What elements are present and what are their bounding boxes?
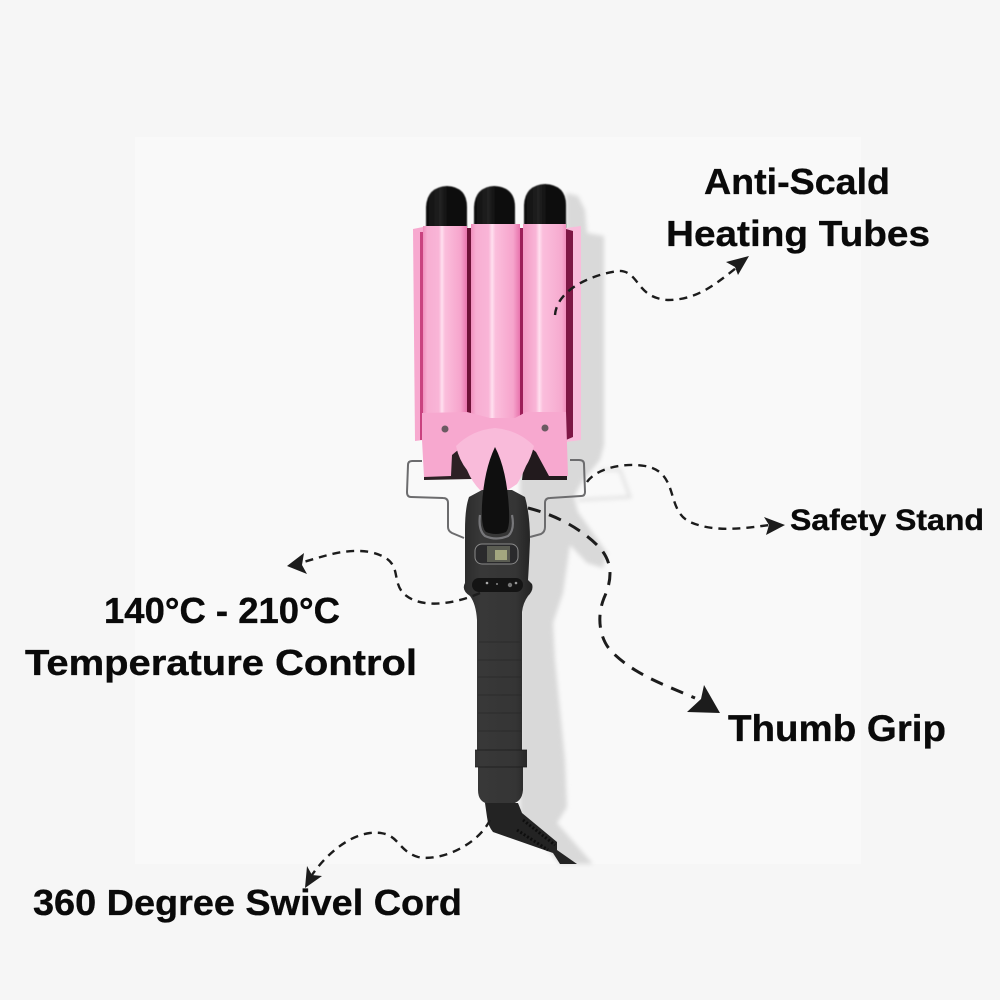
temperature display <box>475 544 518 564</box>
gaps between tubes <box>466 228 472 418</box>
thumb grip <box>480 447 513 538</box>
heating tubes <box>423 226 467 421</box>
label: anti-scald heating tubes: Heating Tubes <box>666 213 930 254</box>
curling iron <box>407 184 585 864</box>
inner photo panel <box>135 137 861 864</box>
control buttons <box>472 578 523 592</box>
barrel tips <box>426 184 566 228</box>
arrow: temperature control <box>287 551 480 604</box>
base screws <box>442 426 448 432</box>
label: swivel cord: 360 Degree Swivel Cord <box>33 882 462 923</box>
base dome <box>456 428 534 492</box>
arrow: swivel cord <box>305 820 490 888</box>
side fins <box>413 227 423 441</box>
icon: safety stand wire <box>407 460 585 538</box>
label: temperature control: Temperature Control <box>25 642 417 683</box>
arrow: heating tubes <box>555 256 749 315</box>
dark notches under base <box>424 446 472 480</box>
grip ridges <box>475 642 527 767</box>
arrow: safety stand <box>587 465 785 535</box>
label: temperature control: 140°C - 210°C <box>104 590 340 631</box>
arrow: thumb grip <box>528 508 720 713</box>
label: safety stand: Safety Stand <box>790 504 984 537</box>
label: temperature control <box>25 590 417 683</box>
label: anti-scald heating tubes: Anti-Scald <box>704 161 890 202</box>
label: thumb grip: Thumb Grip <box>728 708 946 749</box>
label: anti-scald heating tubes <box>666 161 930 254</box>
handle body <box>464 490 532 804</box>
product shadow <box>520 193 630 864</box>
swivel cord <box>485 803 577 864</box>
pink base <box>422 412 568 477</box>
